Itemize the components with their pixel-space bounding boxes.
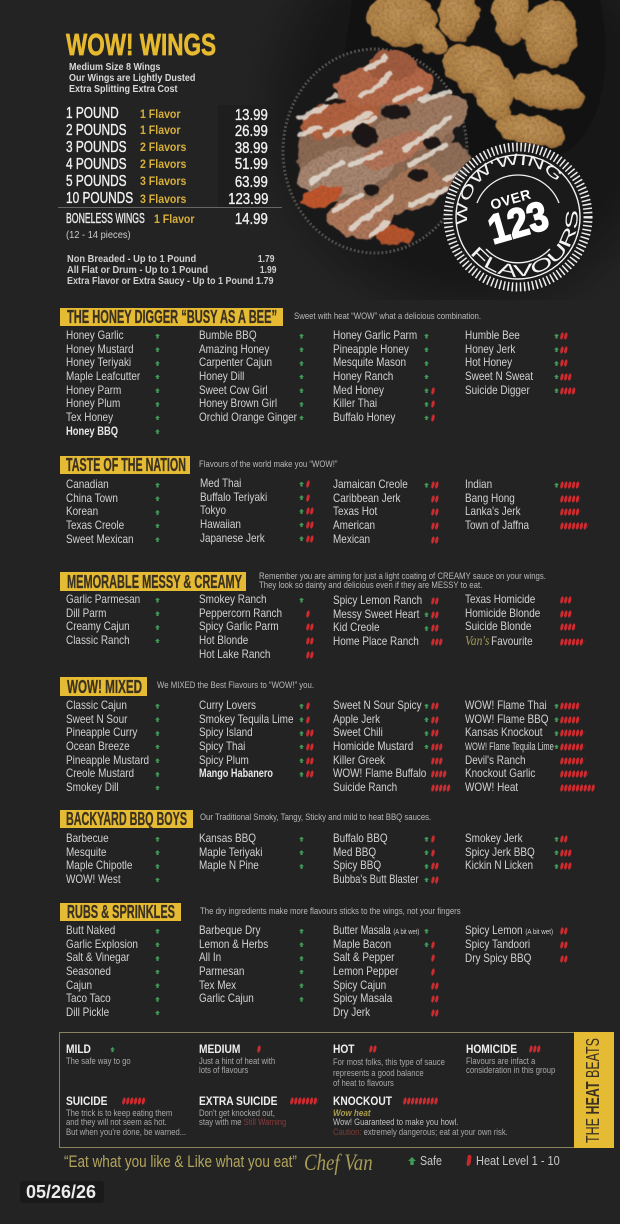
description: The dry ingredients make more flavours sticks to the wings, not your fingers bbox=[200, 906, 461, 917]
column 1: Garlic Explosion bbox=[66, 937, 138, 951]
column 1: Maple Leafcutter bbox=[66, 369, 140, 383]
4 pounds row: 51.99 bbox=[235, 156, 268, 173]
column 1 bbox=[66, 477, 160, 546]
1 pound row: 13.99 bbox=[235, 107, 268, 124]
column 3 bbox=[333, 831, 440, 886]
column 4: Spicy Jerk BBQ bbox=[465, 845, 535, 859]
column 1: China Town bbox=[66, 491, 118, 505]
legend: suicide: The trick is to keep eating them bbox=[66, 1108, 172, 1118]
column 1: Barbecue bbox=[66, 831, 109, 845]
column 2: Spicy Thai bbox=[199, 739, 245, 753]
panel: backyard bbq boys bbox=[60, 810, 572, 886]
column 3: WOW! Flame Buffalo bbox=[333, 766, 426, 780]
column 1: Dill Parm bbox=[66, 606, 106, 620]
divider rule bbox=[58, 207, 282, 208]
column 4 bbox=[465, 477, 588, 532]
column 4: Humble Bee bbox=[465, 328, 520, 342]
description: Flavours of the world make you “WOW!” bbox=[199, 459, 338, 470]
column 4: Dry Spicy BBQ bbox=[465, 951, 531, 965]
column 1 bbox=[66, 328, 160, 438]
column 1 bbox=[66, 831, 160, 886]
column 3: Spicy Lemon Ranch bbox=[333, 593, 422, 607]
column 3 bbox=[333, 477, 440, 546]
10 pounds row bbox=[66, 190, 268, 208]
column 3: Salt & Pepper bbox=[333, 950, 394, 964]
2 pounds row bbox=[66, 122, 268, 140]
badge: over 123 flavours: FLAVOURS bbox=[471, 211, 578, 278]
column 3: Lemon Pepper bbox=[333, 964, 398, 978]
column 4: Spicy Tandoori bbox=[465, 937, 530, 951]
2 pounds row: 26.99 bbox=[235, 123, 268, 140]
column 4: Sweet N Sweat bbox=[465, 369, 533, 383]
column 2: Parmesan bbox=[199, 964, 244, 978]
column 3: Spicy BBQ bbox=[333, 858, 381, 872]
signature: chef van: Chef Van bbox=[304, 1150, 373, 1175]
legend: extra suicide bbox=[199, 1094, 318, 1127]
column 1: Korean bbox=[66, 504, 98, 518]
column 3: Mesquite Mason bbox=[333, 355, 406, 369]
1 pound row: 1 Flavor bbox=[140, 107, 181, 121]
intro text: Medium Size 8 Wings bbox=[69, 62, 160, 73]
boneless wings row: BONELESS WINGS bbox=[66, 211, 145, 227]
column 3: Home Place Ranch bbox=[333, 634, 419, 648]
boneless wings row: 1 Flavor bbox=[154, 212, 195, 226]
column 4: Suicide Digger bbox=[465, 383, 530, 397]
column 2: Maple Teriyaki bbox=[199, 845, 262, 859]
add-ons: All Flat or Drum - Up to 1 Pound bbox=[67, 265, 208, 276]
column 3: American bbox=[333, 518, 375, 532]
column 4: Suicide Blonde bbox=[465, 619, 531, 633]
legend: hot: represents a good balance bbox=[333, 1068, 424, 1078]
column 3: Pineapple Honey bbox=[333, 342, 409, 356]
column 2: Buffalo Teriyaki bbox=[200, 490, 267, 504]
description: They look so dainty and delicious even if they are MESSY to eat. bbox=[259, 580, 482, 591]
column 2 bbox=[199, 923, 304, 1005]
column 4: Spicy Lemon (A bit wet) bbox=[465, 923, 553, 937]
column 4: Hot Honey bbox=[465, 355, 512, 369]
column 4 bbox=[465, 923, 568, 965]
date stamp: 05/26/26 bbox=[26, 1182, 96, 1202]
column 1: Classic Cajun bbox=[66, 698, 127, 712]
column 4: Kansas Knockout bbox=[465, 725, 543, 739]
column 1: Smokey Dill bbox=[66, 780, 119, 794]
5 pounds row: 63.99 bbox=[235, 174, 268, 191]
legend: mild: The safe way to go bbox=[66, 1056, 131, 1066]
column 3: Spicy Masala bbox=[333, 991, 392, 1005]
5 pounds row: 5 POUNDS bbox=[66, 173, 127, 190]
4 pounds row bbox=[66, 156, 268, 173]
column 4: Knockout Garlic bbox=[465, 766, 535, 780]
column 2: Garlic Cajun bbox=[199, 991, 254, 1005]
column 4: Kickin N Licken bbox=[465, 858, 533, 872]
description bbox=[259, 571, 546, 591]
column 1: Honey BBQ bbox=[66, 424, 118, 438]
legend: mild bbox=[66, 1042, 131, 1066]
column 1: Creamy Cajun bbox=[66, 619, 130, 633]
description: Our Traditional Smoky, Tangy, Sticky and mild to heat BBQ sauces. bbox=[200, 812, 431, 823]
column 1: Ocean Breeze bbox=[66, 739, 130, 753]
column 3: Honey Ranch bbox=[333, 369, 393, 383]
column 2: Japanese Jerk bbox=[200, 531, 265, 545]
column 2: Smokey Tequila Lime bbox=[199, 712, 293, 726]
1 pound row bbox=[66, 105, 268, 124]
column 1: Creole Mustard bbox=[66, 766, 134, 780]
add-ons: Non Breaded - Up to 1 Pound bbox=[67, 254, 196, 265]
column 2: All In bbox=[199, 950, 221, 964]
badge: over 123 flavours: 123 bbox=[483, 192, 553, 253]
column 1: Honey Mustard bbox=[66, 342, 134, 356]
column 3: Jamaican Creole bbox=[333, 477, 408, 491]
column 3: Suicide Ranch bbox=[333, 780, 397, 794]
column 1: Cajun bbox=[66, 978, 92, 992]
legend: knockout bbox=[333, 1094, 508, 1137]
tab: the heat beats bbox=[574, 1032, 614, 1148]
column 1: Tex Honey bbox=[66, 410, 113, 424]
5 pounds row bbox=[66, 173, 268, 191]
column 3: Killer Thai bbox=[333, 396, 377, 410]
boneless wings row: (12 - 14 pieces) bbox=[66, 230, 131, 241]
column 2: Tex Mex bbox=[199, 978, 236, 992]
column 4: Smokey Jerk bbox=[465, 831, 523, 845]
panel: taste of the nation bbox=[60, 456, 588, 546]
column 4: Bang Hong bbox=[465, 491, 515, 505]
column 2 bbox=[200, 476, 314, 545]
column 2: Peppercorn Ranch bbox=[199, 606, 282, 620]
column 1: Honey Teriyaki bbox=[66, 355, 131, 369]
column 3: Honey Garlic Parm bbox=[333, 328, 417, 342]
column 4: Devil's Ranch bbox=[465, 753, 526, 767]
column 1: Sweet N Sour bbox=[66, 712, 127, 726]
panel: the honey digger bbox=[60, 308, 576, 438]
column 2: Maple N Pine bbox=[199, 858, 259, 872]
key: safe: Safe bbox=[420, 1154, 442, 1168]
legend: medium bbox=[199, 1042, 275, 1075]
legend: hot bbox=[333, 1042, 445, 1088]
column 4: Homicide Blonde bbox=[465, 606, 540, 620]
column 1 bbox=[66, 923, 160, 1019]
legend: medium: MEDIUM bbox=[199, 1042, 240, 1056]
column 3: Caribbean Jerk bbox=[333, 491, 401, 505]
panel: wow mixed bbox=[60, 677, 595, 794]
column 4: WOW! Flame BBQ bbox=[465, 712, 549, 726]
column 1 bbox=[66, 698, 160, 794]
column 2: Hawaiian bbox=[200, 517, 241, 531]
column 3: Buffalo Honey bbox=[333, 410, 395, 424]
column 1: WOW! West bbox=[66, 872, 121, 886]
column 1: Honey Plum bbox=[66, 396, 120, 410]
column 3: Kid Creole bbox=[333, 620, 380, 634]
add-ons: 1.99 bbox=[259, 265, 276, 276]
column 3: Butter Masala (A bit wet) bbox=[333, 923, 419, 937]
legend frame bbox=[59, 1032, 576, 1148]
legend: suicide: But when you're done, be warned... bbox=[66, 1127, 186, 1137]
10 pounds row: 10 POUNDS bbox=[66, 190, 133, 207]
column 1: Seasoned bbox=[66, 964, 111, 978]
intro text bbox=[69, 62, 195, 95]
badge: over 123 flavours: OVER bbox=[488, 186, 533, 213]
column 2: Amazing Honey bbox=[199, 342, 269, 356]
4 pounds row: 4 POUNDS bbox=[66, 156, 127, 173]
column 4: WOW! Flame Thai bbox=[465, 698, 547, 712]
panel: memorable messy and creamy bbox=[60, 571, 584, 661]
key: heat level: Heat Level 1 - 10 bbox=[476, 1154, 560, 1168]
4 pounds row: 2 Flavors bbox=[140, 157, 186, 171]
column 4 bbox=[465, 592, 584, 649]
column 2 bbox=[199, 698, 314, 780]
column 4 bbox=[465, 831, 572, 872]
column 1 bbox=[66, 592, 160, 647]
badge: over 123 flavours bbox=[443, 142, 592, 292]
key: safe bbox=[408, 1154, 442, 1168]
legend: extra suicide: stay with me Still Warning bbox=[199, 1117, 286, 1127]
legend: suicide: and they will not seem as hot. bbox=[66, 1117, 167, 1127]
legend: medium: lots of flavours bbox=[199, 1065, 248, 1075]
column 1: Honey Garlic bbox=[66, 328, 124, 342]
column 2: Spicy Plum bbox=[199, 753, 249, 767]
intro text: Our Wings are Lightly Dusted bbox=[69, 73, 195, 84]
intro text: Extra Splitting Extra Cost bbox=[69, 84, 178, 95]
tagline: “Eat what you like & Like what you eat” bbox=[64, 1152, 297, 1171]
legend: knockout: Caution: extremely dangerous; eat at your own risk. bbox=[333, 1127, 508, 1137]
legend: knockout: KNOCKOUT bbox=[333, 1094, 392, 1108]
legend: hot: HOT bbox=[333, 1042, 355, 1056]
column 3: Texas Hot bbox=[333, 504, 377, 518]
3 pounds row: 3 POUNDS bbox=[66, 139, 127, 156]
column 3: Sweet Chili bbox=[333, 725, 383, 739]
column 3 bbox=[333, 593, 444, 648]
column 2: Barbeque Dry bbox=[199, 923, 260, 937]
column 3: Dry Jerk bbox=[333, 1005, 370, 1019]
column 3: Buffalo BBQ bbox=[333, 831, 388, 845]
column 2: Med Thai bbox=[200, 476, 241, 490]
column 3: Sweet N Sour Spicy bbox=[333, 698, 422, 712]
column 3: Homicide Mustard bbox=[333, 739, 413, 753]
legend: extra suicide: EXTRA SUICIDE bbox=[199, 1094, 277, 1108]
legend: extra suicide: Don't get knocked out, bbox=[199, 1108, 275, 1118]
column 2: Honey Dill bbox=[199, 369, 244, 383]
column 4 bbox=[465, 328, 576, 397]
add-ons: 1.79 bbox=[257, 254, 274, 265]
column 4: WOW! Heat bbox=[465, 780, 518, 794]
legend: homicide: Flavours are infact a bbox=[466, 1056, 535, 1066]
column 3: Med BBQ bbox=[333, 845, 376, 859]
column 2: Honey Brown Girl bbox=[199, 396, 277, 410]
legend: homicide: consideration in this group bbox=[466, 1065, 555, 1075]
shading behind prices bbox=[218, 105, 268, 207]
column 4 bbox=[465, 698, 595, 794]
column 3 bbox=[333, 698, 452, 794]
column 3: Bubba's Butt Blaster bbox=[333, 872, 419, 886]
column 3: Mexican bbox=[333, 532, 370, 546]
column 1: Dill Pickle bbox=[66, 1005, 109, 1019]
column 2: Bumble BBQ bbox=[199, 328, 257, 342]
badge: over 123 flavours: WOW'WING bbox=[456, 154, 561, 224]
column 2 bbox=[199, 592, 314, 661]
3 pounds row bbox=[66, 139, 268, 157]
column 1: Sweet Mexican bbox=[66, 532, 134, 546]
legend: hot: of heat to flavours bbox=[333, 1078, 394, 1088]
column 3: Med Honey bbox=[333, 383, 384, 397]
boneless wings row bbox=[66, 211, 268, 241]
1 pound row: 1 POUND bbox=[66, 105, 119, 122]
column 1: Mesquite bbox=[66, 845, 106, 859]
description: We MIXED the Best Flavours to “WOW!” you. bbox=[157, 680, 314, 691]
column 2: Spicy Island bbox=[199, 725, 253, 739]
legend: knockout: Wow! Guaranteed to make you howl. bbox=[333, 1117, 458, 1127]
panel: rubs and sprinkles bbox=[60, 903, 568, 1019]
5 pounds row: 3 Flavors bbox=[140, 174, 186, 188]
column 1: Texas Creole bbox=[66, 518, 124, 532]
boneless wings row: 14.99 bbox=[235, 211, 268, 228]
legend: suicide bbox=[66, 1094, 186, 1137]
2 pounds row: 2 POUNDS bbox=[66, 122, 127, 139]
column 3: Maple Bacon bbox=[333, 937, 391, 951]
column 1: Honey Parm bbox=[66, 383, 121, 397]
column 4: Town of Jaffna bbox=[465, 518, 529, 532]
column 2: Hot Blonde bbox=[199, 633, 248, 647]
column 1: Taco Taco bbox=[66, 991, 111, 1005]
panel: heat legend bbox=[59, 1032, 614, 1148]
column 2: Tokyo bbox=[200, 503, 226, 517]
column 4: Honey Jerk bbox=[465, 342, 515, 356]
column 2: Sweet Cow Girl bbox=[199, 383, 268, 397]
price list bbox=[58, 105, 282, 287]
column 2 bbox=[199, 328, 304, 424]
legend: homicide bbox=[466, 1042, 555, 1075]
column 1: Pineapple Mustard bbox=[66, 753, 149, 767]
column 2: Kansas BBQ bbox=[199, 831, 256, 845]
column 1: Garlic Parmesan bbox=[66, 592, 140, 606]
column 4: Texas Homicide bbox=[465, 592, 535, 606]
column 4: Lanka's Jerk bbox=[465, 504, 521, 518]
column 1: Salt & Vinegar bbox=[66, 950, 129, 964]
column 2 bbox=[199, 831, 304, 872]
column 4: Indian bbox=[465, 477, 492, 491]
column 1: Pineapple Curry bbox=[66, 725, 137, 739]
column 1: Maple Chipotle bbox=[66, 858, 132, 872]
column 2: Hot Lake Ranch bbox=[199, 647, 270, 661]
column 2: Orchid Orange Ginger bbox=[199, 410, 297, 424]
column 3: Messy Sweet Heart bbox=[333, 607, 419, 621]
legend: hot: For most folks, this type of sauce bbox=[333, 1057, 445, 1067]
add-ons bbox=[67, 254, 276, 287]
2 pounds row: 1 Flavor bbox=[140, 123, 181, 137]
column 3: Killer Greek bbox=[333, 753, 385, 767]
legend: medium: Just a hint of heat with bbox=[199, 1056, 275, 1066]
column 3: Spicy Cajun bbox=[333, 978, 386, 992]
column 1: Classic Ranch bbox=[66, 633, 130, 647]
add-ons: Extra Flavor or Extra Saucy - Up to 1 Pound 1.79 bbox=[67, 276, 274, 287]
column 1: Butt Naked bbox=[66, 923, 115, 937]
10 pounds row: 3 Flavors bbox=[140, 192, 186, 206]
column 2: Mango Habanero bbox=[199, 766, 273, 780]
column 2: Curry Lovers bbox=[199, 698, 256, 712]
column 4: Van'sFavourite bbox=[465, 634, 533, 649]
column 4: WOW! Flame Tequila Lime bbox=[465, 741, 554, 753]
3 pounds row: 2 Flavors bbox=[140, 140, 186, 154]
legend: mild: MILD bbox=[66, 1042, 91, 1056]
column 3 bbox=[333, 328, 435, 424]
column 2: Carpenter Cajun bbox=[199, 355, 272, 369]
column 2: Smokey Ranch bbox=[199, 592, 267, 606]
column 2: Lemon & Herbs bbox=[199, 937, 268, 951]
10 pounds row: 123.99 bbox=[228, 191, 268, 208]
column 1: Canadian bbox=[66, 477, 109, 491]
legend: homicide: HOMICIDE bbox=[466, 1042, 517, 1056]
column 2: Spicy Garlic Parm bbox=[199, 619, 279, 633]
column 3 bbox=[333, 923, 440, 1019]
column 3: Apple Jerk bbox=[333, 712, 380, 726]
description: Sweet with heat “WOW” what a delicious combination. bbox=[294, 311, 481, 322]
legend: suicide: SUICIDE bbox=[66, 1094, 107, 1108]
legend: knockout: Wow heat bbox=[333, 1108, 371, 1119]
3 pounds row: 38.99 bbox=[235, 140, 268, 157]
description: Remember you are aiming for just a light coating of CREAMY sauce on your wings. bbox=[259, 571, 546, 582]
food photo bbox=[282, 0, 620, 296]
